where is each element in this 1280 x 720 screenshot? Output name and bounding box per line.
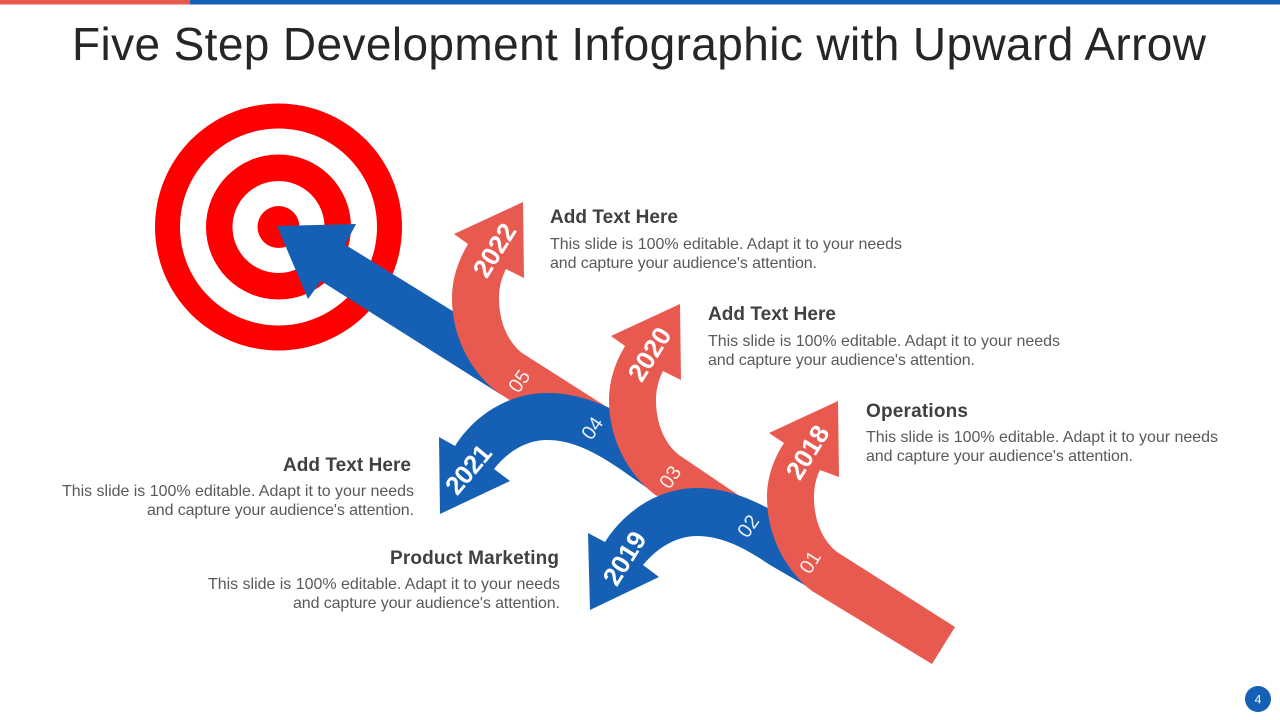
icon: target bullseye <box>155 104 402 350</box>
text block: 2020: and capture your audience's attention. <box>708 352 975 369</box>
text block: Product Marketing 2019 <box>208 548 560 612</box>
page number badge: 4 <box>1255 692 1262 706</box>
top accent bar <box>0 0 1280 4</box>
step number 05: 05 <box>504 366 535 397</box>
text block: Operations 2018: This slide is 100% editable. Adapt it to your needs <box>866 429 1218 446</box>
text block: Operations 2018 <box>866 401 1218 465</box>
text block: 2022: Add Text Here <box>550 207 678 228</box>
text block: 2021: This slide is 100% editable. Adapt it to your needs <box>62 483 414 500</box>
arrow: 2019 step 02 <box>588 488 808 610</box>
arrow: 2021 step 04 <box>439 393 650 514</box>
text block: Operations 2018: Operations <box>866 401 968 422</box>
arrow: 2020 step 03 <box>609 304 790 535</box>
arrow: 2022 step 05 <box>452 202 640 432</box>
step number 02: 02 <box>733 511 764 542</box>
text block: 2021 <box>62 455 414 519</box>
text block: 2022: This slide is 100% editable. Adapt it to your needs <box>550 236 902 253</box>
text block: 2021: and capture your audience's attention. <box>147 502 414 519</box>
step number 04: 04 <box>577 413 608 444</box>
step number 01: 01 <box>796 547 826 578</box>
page number badge <box>1245 686 1271 712</box>
step number 03: 03 <box>655 462 686 493</box>
text block: 2021: Add Text Here <box>283 455 411 476</box>
text block: Operations 2018: and capture your audience's attention. <box>866 448 1133 465</box>
text block: 2022: and capture your audience's attention. <box>550 255 817 272</box>
text block: 2020 <box>708 304 1060 369</box>
text block: Product Marketing 2019: This slide is 100% editable. Adapt it to your needs <box>208 576 560 593</box>
text block: 2022 <box>550 207 902 272</box>
year label 2022: 2022 <box>466 218 522 283</box>
title: Five Step Development Infographic with Upward Arrow <box>72 18 1207 70</box>
year label 2019: 2019 <box>596 526 652 591</box>
text block: Product Marketing 2019: Product Marketing <box>390 548 559 569</box>
year label 2021: 2021 <box>439 438 498 500</box>
arrow: 2018 step 01 <box>767 401 955 664</box>
text block: Product Marketing 2019: and capture your audience's attention. <box>293 595 560 612</box>
year label 2018: 2018 <box>779 420 835 485</box>
arrow: main blue arrow pointing at target <box>277 224 500 394</box>
text block: 2020: This slide is 100% editable. Adapt it to your needs <box>708 333 1060 350</box>
text block: 2020: Add Text Here <box>708 304 836 325</box>
year label 2020: 2020 <box>621 322 677 387</box>
